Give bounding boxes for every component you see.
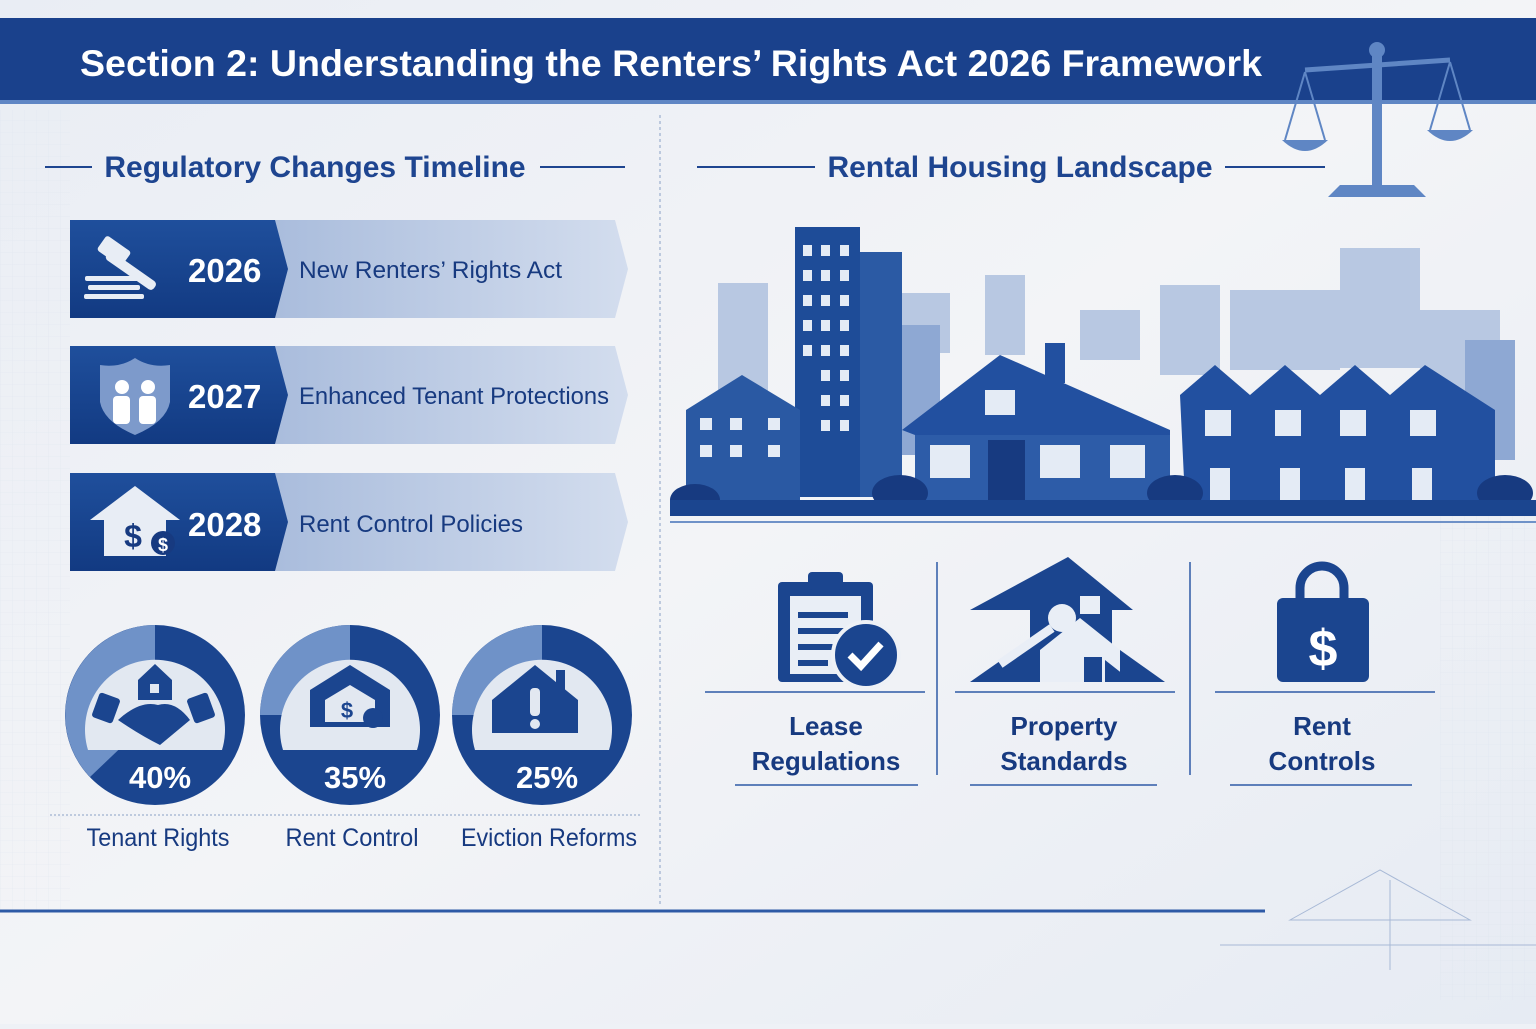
timeline row: 2026 xyxy=(70,220,628,318)
timeline row: 2027: 2027 xyxy=(188,378,261,415)
donut: tenant rights 40%: 40% xyxy=(129,760,191,795)
donut: rent control 35% xyxy=(260,625,440,852)
label: lease regulations: Regulations xyxy=(752,746,900,776)
donut: eviction reforms 25%: 25% xyxy=(516,760,578,795)
label: property standards xyxy=(955,692,1175,785)
label: property standards: Standards xyxy=(1000,746,1128,776)
donut: rent control 35%: $ xyxy=(341,698,353,723)
timeline row: 2027 xyxy=(70,346,628,444)
timeline row: 2028: 2028 xyxy=(188,506,261,543)
heading: regulatory changes timeline: Regulatory Changes Timeline xyxy=(104,151,526,184)
donut: rent control 35%: 35% xyxy=(324,760,386,795)
label: property standards: Property xyxy=(1011,711,1118,741)
label: rent controls xyxy=(1215,692,1435,785)
timeline row: 2028 xyxy=(70,473,628,571)
label: Rent Control xyxy=(286,824,418,852)
icon: gavel xyxy=(84,235,158,299)
icon: padlock dollar: $ xyxy=(1309,620,1338,678)
label: Tenant Rights xyxy=(86,824,230,852)
icon: house with dollar xyxy=(90,486,180,556)
timeline row: 2027: Enhanced Tenant Protections xyxy=(299,383,609,410)
label: lease regulations xyxy=(705,692,925,785)
label: Eviction Reforms xyxy=(461,824,637,852)
icon: shield with people xyxy=(100,358,170,435)
cityscape illustration xyxy=(670,227,1536,522)
donut: eviction reforms 25% xyxy=(452,625,637,852)
label: rent controls: Controls xyxy=(1269,746,1375,776)
label: lease regulations: Lease xyxy=(789,711,863,741)
timeline row: 2026: 2026 xyxy=(188,252,261,289)
title: Section 2: Understanding the Renters’ Rights Act 2026 Framework xyxy=(80,43,1262,84)
timeline row: 2026: New Renters’ Rights Act xyxy=(299,257,562,284)
heading: rental housing landscape: Rental Housing Landscape xyxy=(827,151,1213,184)
header bar xyxy=(0,18,1536,104)
icon: house with key xyxy=(970,557,1165,682)
icon: house with dollar: $ xyxy=(124,518,142,554)
icon: house with dollar: $ xyxy=(158,535,168,555)
label: rent controls: Rent xyxy=(1293,711,1351,741)
timeline row: 2028: Rent Control Policies xyxy=(299,511,523,538)
icon: padlock dollar xyxy=(1277,566,1369,682)
donut: tenant rights 40% xyxy=(65,625,245,852)
icon: scales of justice xyxy=(1282,42,1473,197)
icon: lease clipboard xyxy=(778,572,899,688)
